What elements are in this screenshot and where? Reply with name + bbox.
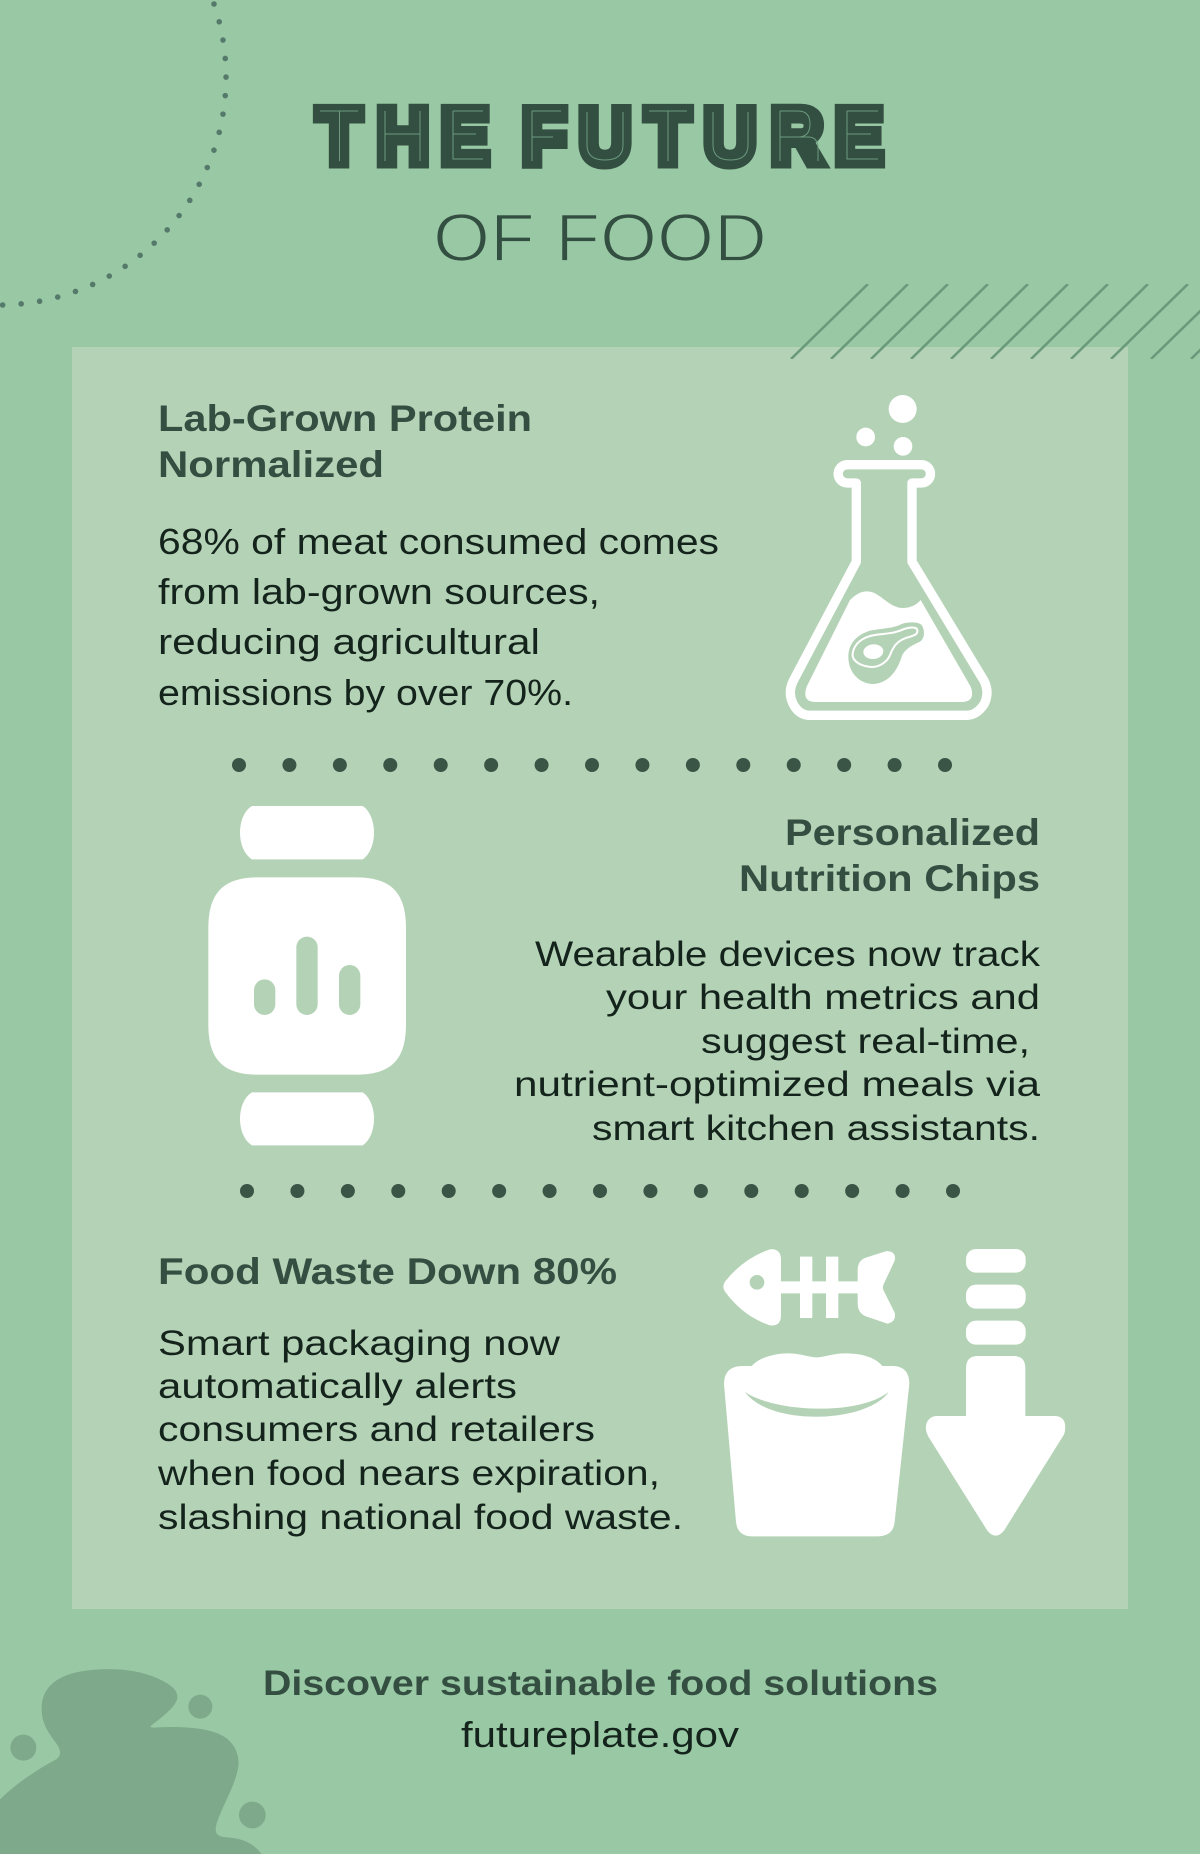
- body text: lab-grown protein: from lab-grown sources,: [158, 571, 600, 612]
- footer url: futureplate.gov: [461, 1714, 739, 1755]
- heading: food waste down: Food Waste Down 80%: [158, 1251, 617, 1292]
- body text: food waste down: automatically alerts: [158, 1367, 517, 1406]
- body text: food waste down: when food nears expiration,: [157, 1454, 660, 1493]
- footer call to action: [263, 1664, 938, 1755]
- title inline strokes: [320, 111, 878, 161]
- body text: personalized nutrition chips: smart kitchen assistants.: [592, 1109, 1040, 1148]
- body text: personalized nutrition chips: nutrient-optimized meals via: [514, 1065, 1041, 1104]
- body text: food waste down: consumers and retailers: [158, 1410, 595, 1449]
- heading: lab-grown protein: Lab-Grown Protein: [158, 398, 532, 439]
- section 1: lab-grown protein: [158, 395, 987, 715]
- body text: lab-grown protein: reducing agricultural: [158, 621, 540, 662]
- heading: personalized nutrition chips: Nutrition Chips: [739, 858, 1040, 899]
- body text: lab-grown protein: emissions by over 70%.: [158, 672, 573, 713]
- dotted divider 2: [247, 1184, 954, 1198]
- icon: flask with lab-grown meat: [790, 395, 987, 715]
- body text: food waste down: Smart packaging now: [158, 1324, 561, 1363]
- body text: food waste down: slashing national food waste.: [158, 1498, 683, 1537]
- icon: smart watch: [208, 806, 406, 1145]
- title line 2: OF FOOD: [433, 200, 767, 276]
- icon: down arrow: [926, 1249, 1065, 1536]
- content panel background: [72, 347, 1128, 1609]
- title: [317, 92, 883, 276]
- body text: personalized nutrition chips: your health metrics and: [606, 978, 1040, 1017]
- footer heading: Discover sustainable food solutions: [263, 1664, 938, 1703]
- decorative blob with dots: [0, 1669, 266, 1854]
- icon: fish bone and food bucket: [723, 1249, 909, 1536]
- body text: personalized nutrition chips: Wearable devices now track: [535, 935, 1041, 974]
- section 2: personalized nutrition chips: [208, 806, 1041, 1148]
- title line 1: THE FUTURE: [317, 92, 883, 180]
- decorative dotted arc: [2, 4, 226, 305]
- hatch lines: [791, 284, 1200, 359]
- body text: personalized nutrition chips: suggest real-time,: [701, 1022, 1030, 1061]
- dotted divider 1: [239, 758, 946, 772]
- heading: personalized nutrition chips: Personalized: [785, 812, 1040, 853]
- heading: lab-grown protein: Normalized: [158, 444, 384, 485]
- section 3: food waste down: [157, 1249, 1065, 1537]
- body text: lab-grown protein: 68% of meat consumed comes: [158, 521, 719, 562]
